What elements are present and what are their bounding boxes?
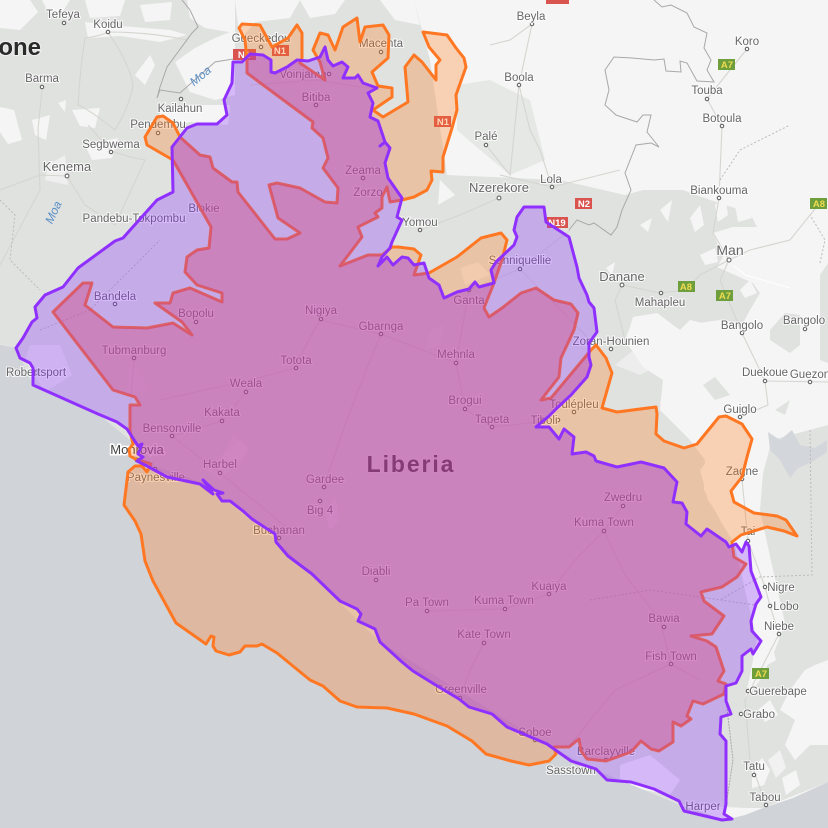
city Tabou: Tabou: [749, 792, 781, 804]
city Niebe: Niebe: [764, 621, 794, 633]
badge top: [546, 0, 569, 4]
city Sasstown: Sasstown: [546, 765, 596, 777]
city Kakata: Kakata: [204, 407, 241, 419]
city Tai: Tai: [741, 526, 755, 538]
badge A8: A8: [680, 282, 692, 293]
city Zagne: Zagne: [726, 466, 758, 478]
badge A7: [752, 668, 769, 680]
badge N2: [575, 198, 592, 210]
city Grabo: Grabo: [743, 709, 775, 721]
city Toulépleu: Toulépleu: [549, 399, 599, 411]
badge N1: N1: [274, 46, 287, 57]
badge N1: N1: [437, 117, 450, 128]
city Kailahun: Kailahun: [158, 103, 202, 115]
city Macenta: Macenta: [359, 38, 404, 50]
city Tubmanburg: Tubmanburg: [102, 345, 166, 357]
city Zeama: Zeama: [345, 165, 381, 177]
label: Moa river east: Moa: [187, 63, 214, 89]
overlap tint between the two countries: [54, 52, 746, 761]
city Bangolo: Bangolo: [721, 320, 763, 332]
city Lobo: Lobo: [773, 601, 799, 613]
city Tiboli: Tiboli: [530, 415, 558, 427]
city Kailahun: [158, 97, 202, 115]
city Soboe: Soboe: [518, 727, 552, 739]
city Greenville: Greenville: [435, 684, 487, 696]
city Bawia: Bawia: [648, 613, 680, 625]
city Ganta: Ganta: [453, 295, 485, 307]
city Mehnla: Mehnla: [437, 349, 475, 361]
badge A8: [678, 281, 695, 293]
city Kuaiya: Kuaiya: [531, 581, 567, 593]
badge A7: [718, 59, 735, 71]
city Barma: Barma: [25, 73, 60, 85]
badge N1: [233, 49, 256, 61]
city Segbwema: Segbwema: [82, 139, 140, 151]
city Bitiba: Bitiba: [302, 92, 331, 104]
badge A7: A7: [719, 291, 731, 302]
badge A8: [810, 198, 827, 210]
city Danane: Danane: [599, 269, 645, 284]
city Duekoue: Duekoue: [742, 367, 788, 379]
badge N1: [272, 45, 289, 57]
river labels: [42, 63, 214, 226]
city Biankouma: Biankouma: [690, 185, 748, 197]
label: Moa river west: Moa: [42, 198, 65, 226]
city Kuma Town east: Kuma Town: [574, 517, 634, 529]
badge A7: A7: [721, 60, 733, 71]
city Big 4: [307, 499, 334, 517]
international borders: [157, 0, 733, 806]
city Pa Town: Pa Town: [405, 597, 449, 609]
city Guerebape: Guerebape: [749, 686, 807, 698]
city Gbarnga: Gbarnga: [359, 321, 404, 333]
city Weala: Weala: [230, 378, 263, 390]
city Gardee: Gardee: [306, 474, 344, 486]
city Big 4: Big 4: [307, 505, 334, 517]
badge N1: N1: [238, 50, 251, 61]
badge A7: [716, 290, 733, 302]
city Koro: Koro: [735, 36, 759, 48]
lake: [768, 430, 827, 478]
city Monrovia: Monrovia: [110, 442, 165, 457]
city Harper: Harper: [685, 801, 721, 813]
badge N1: [434, 116, 451, 128]
city Mahapleu: Mahapleu: [635, 297, 685, 309]
badge A8: A8: [813, 199, 825, 210]
city Man: Man: [716, 242, 744, 258]
city Touba: Touba: [691, 85, 723, 97]
road badges: [233, 0, 827, 680]
city Harbel: Harbel: [203, 459, 237, 471]
city Mahapleu: [635, 291, 685, 309]
city Paynesville: Paynesville: [127, 472, 185, 484]
badge N19: N19: [548, 218, 566, 229]
city Kate Town: Kate Town: [457, 629, 511, 641]
city Zwedru: Zwedru: [604, 492, 642, 504]
sea: [0, 345, 828, 828]
city Bandela: Bandela: [94, 291, 137, 303]
city Palé: Palé: [474, 131, 498, 143]
city Bensonville: Bensonville: [143, 423, 201, 435]
city Pendembu: Pendembu: [130, 119, 186, 131]
city Totota: Totota: [280, 355, 312, 367]
city Fish Town: Fish Town: [645, 651, 697, 663]
city Beyla: Beyla: [517, 11, 546, 23]
city Botoula: Botoula: [702, 113, 742, 125]
badge N2: N2: [578, 199, 590, 210]
city Sanniquellie: Sanniquellie: [489, 255, 551, 267]
city Yomou: Yomou: [402, 217, 438, 229]
city Nzerekore: Nzerekore: [469, 180, 529, 195]
city Nigiya: Nigiya: [305, 305, 338, 317]
city Bangolo east: Bangolo: [783, 315, 825, 327]
city Gueckedou: Gueckedou: [232, 33, 290, 45]
white minor road: [733, 265, 790, 288]
city Kuma Town: Kuma Town: [474, 595, 534, 607]
city Brogui: Brogui: [448, 395, 482, 407]
city Guiglo: Guiglo: [723, 404, 757, 416]
city Koidu: Koidu: [93, 19, 123, 31]
city Voinjama: Voinjama: [279, 69, 327, 81]
city Nigre: Nigre: [767, 582, 795, 594]
city Zorzo: Zorzo: [353, 187, 383, 199]
city Tefeya: Tefeya: [46, 9, 81, 21]
city Blokie: Blokie: [188, 203, 220, 215]
city Lola: Lola: [540, 174, 562, 186]
city Tatu: Tatu: [743, 761, 765, 773]
city Zoran-Hounien: Zoran-Hounien: [573, 336, 649, 348]
city Diabli: Diabli: [362, 566, 390, 578]
city Ganta: [453, 288, 485, 307]
city Robertsport: Robertsport: [6, 367, 67, 379]
city Barclayville: Barclayville: [577, 746, 635, 758]
badge A7: A7: [755, 669, 767, 680]
city Boola: Boola: [504, 72, 534, 84]
district boundaries: [0, 125, 825, 605]
city Pandebu-Tokpombu: Pandebu-Tokpombu: [83, 213, 185, 225]
city Buchanan: Buchanan: [253, 525, 305, 537]
city Bopolu: Bopolu: [178, 308, 214, 320]
country label: Liberia: Liberia: [367, 451, 455, 477]
city Tapeta: Tapeta: [475, 414, 510, 426]
city Kenema: Kenema: [43, 159, 92, 174]
